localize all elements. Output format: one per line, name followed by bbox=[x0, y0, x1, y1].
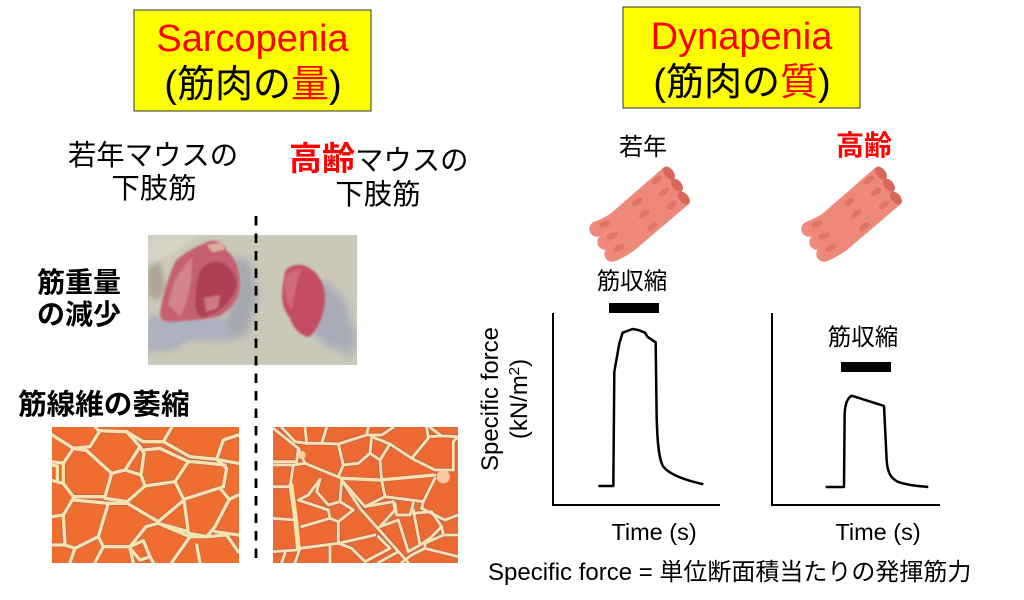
label: aged mouse lower limb muscle: 下肢筋 bbox=[335, 179, 421, 211]
histology: aged muscle fibers bbox=[273, 427, 458, 563]
x axis label, young: Time (s) bbox=[611, 519, 697, 545]
photo tan patch bbox=[148, 262, 166, 300]
label: aged mouse lower limb muscle bbox=[289, 140, 469, 211]
label: muscle mass decrease bbox=[37, 267, 121, 330]
photo shadow left bbox=[148, 255, 258, 350]
photo shadow right bbox=[312, 278, 357, 356]
title: Dynapenia bbox=[623, 7, 860, 108]
small muscle bbox=[282, 265, 325, 337]
label: muscle mass decrease: 筋重量 bbox=[37, 267, 121, 298]
label: young mouse lower limb muscle: 下肢筋 bbox=[111, 173, 197, 205]
label: aged: 高齢 bbox=[836, 130, 892, 161]
title: Sarcopenia bbox=[134, 10, 371, 111]
photo highlight bbox=[149, 236, 192, 260]
label: young mouse lower limb muscle bbox=[68, 140, 238, 205]
definition footnote: Specific force = 単位断面積当たりの発揮筋力 bbox=[488, 559, 971, 586]
title: Sarcopenia: Sarcopenia bbox=[156, 18, 349, 60]
label: muscle mass decrease: の減少 bbox=[37, 299, 121, 330]
photo shadow lower-left bbox=[148, 315, 235, 350]
label: contraction, young: 筋収縮 bbox=[597, 268, 667, 294]
title: Sarcopenia: (筋肉の量) bbox=[164, 64, 342, 106]
chart: aged force curve bbox=[772, 313, 940, 505]
dashed divider bbox=[255, 216, 257, 563]
label: contraction, aged: 筋収縮 bbox=[828, 324, 898, 350]
y axis label: Specific force bbox=[477, 327, 504, 471]
icon: aged muscle fibers bbox=[801, 164, 904, 262]
icon: young muscle fibers bbox=[589, 164, 692, 262]
label: young mouse lower limb muscle: 若年マウスの bbox=[68, 140, 238, 172]
y axis label: (kN/m bbox=[506, 375, 533, 439]
y axis label: 2 bbox=[506, 367, 523, 375]
histology: young muscle fibers bbox=[52, 427, 239, 563]
label: muscle fiber atrophy: 筋線維の萎縮 bbox=[18, 389, 190, 421]
y axis label: ) bbox=[506, 359, 533, 367]
large muscle bbox=[160, 241, 240, 322]
title: Dynapenia: Dynapenia bbox=[651, 16, 833, 58]
chart: young force curve bbox=[553, 313, 720, 505]
bar: contraction period, aged bbox=[841, 362, 891, 372]
label: young: 若年 bbox=[619, 134, 667, 161]
label: aged mouse lower limb muscle: 高齢マウスの bbox=[289, 140, 469, 177]
title: Dynapenia: (筋肉の質) bbox=[653, 62, 831, 104]
x axis label, aged: Time (s) bbox=[835, 519, 921, 545]
y axis label bbox=[477, 327, 533, 471]
photo: muscle mass comparison bbox=[148, 235, 357, 365]
bar: contraction period, young bbox=[609, 303, 659, 313]
